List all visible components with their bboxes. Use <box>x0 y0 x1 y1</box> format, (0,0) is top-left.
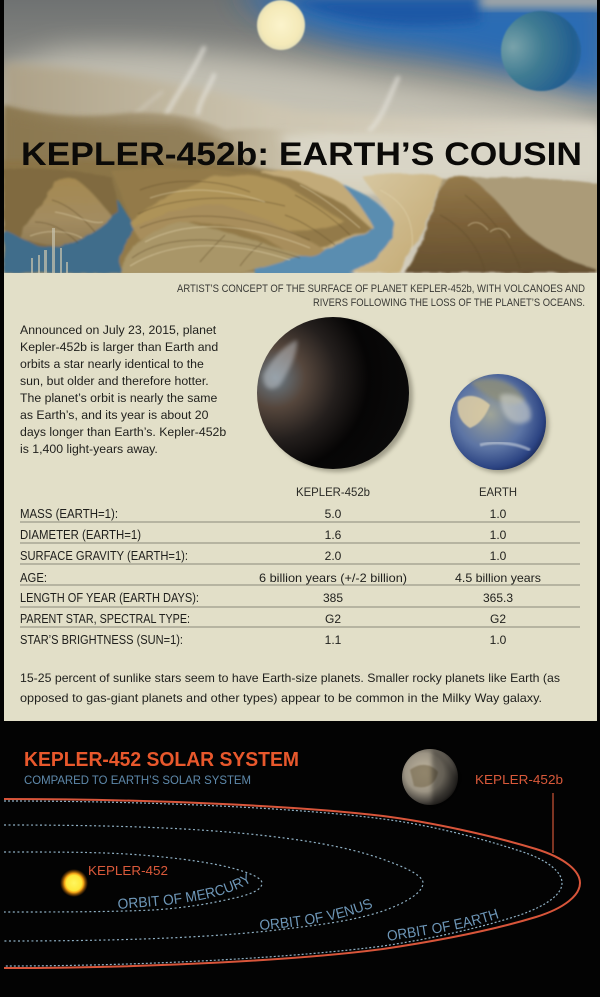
row: diameter: 1.6 <box>325 528 342 542</box>
closing note: 15-25 percent of sunlike stars seem to have Earth-size planets. Smaller rocky planets like Earth (as <box>20 671 560 685</box>
closing note <box>20 671 560 705</box>
row: mass: MASS (EARTH=1): <box>20 507 118 521</box>
panel: comparison data <box>4 273 597 721</box>
centre middle ridge <box>133 205 325 257</box>
pale left bank <box>262 170 374 256</box>
blue sky <box>235 0 600 95</box>
section subheading: COMPARED TO EARTH’S SOLAR SYSTEM <box>24 773 251 787</box>
intro paragraph: as Earth’s, and its year is about 20 <box>20 408 209 422</box>
centre lower ridge <box>120 222 302 273</box>
intro paragraph: Kepler-452b is larger than Earth and <box>20 340 218 354</box>
pale plain <box>280 135 600 180</box>
table column headers <box>296 485 517 499</box>
label: orbit of Venus: ORBIT OF VENUS <box>260 899 372 930</box>
title: KEPLER-452b: EARTH’S COUSIN <box>21 136 582 172</box>
hero: artist's painting of the planet surface <box>0 0 600 276</box>
row: length of year: 385 <box>323 591 343 605</box>
data table <box>20 507 580 647</box>
intro paragraph <box>20 323 226 456</box>
volcanic plumes <box>135 48 398 130</box>
row: parent star: PARENT STAR, SPECTRAL TYPE: <box>20 612 190 626</box>
river lower section <box>4 200 140 273</box>
intro paragraph: Announced on July 23, 2015, planet <box>20 323 217 337</box>
label: orbit of Mercury: ORBIT OF MERCURY <box>118 873 249 909</box>
row: surface gravity: SURFACE GRAVITY (EARTH=1): <box>20 549 188 563</box>
centre upper ridge <box>130 175 345 232</box>
planet: Earth <box>450 374 549 473</box>
intro paragraph: The planet’s orbit is nearly the same <box>20 391 217 405</box>
back brown slopes <box>4 168 118 247</box>
river <box>255 184 395 276</box>
orbit of Kepler-452b <box>4 799 580 968</box>
intro paragraph: orbits a star nearly identical to the <box>20 357 204 371</box>
rock strata <box>35 180 484 266</box>
row: parent star <box>20 612 506 626</box>
pale right bank <box>350 173 442 273</box>
row: length of year: LENGTH OF YEAR (EARTH DAYS): <box>20 591 199 605</box>
dark mountain <box>405 176 597 273</box>
terrain <box>4 168 600 276</box>
planet: small Kepler-452b <box>402 749 458 805</box>
orbit of Mercury <box>4 852 262 912</box>
row: length of year: 365.3 <box>483 591 513 605</box>
caption <box>177 283 585 309</box>
row: parent star: G2 <box>325 612 341 626</box>
row: brightness: 1.0 <box>490 633 507 647</box>
distant moon planet <box>501 11 581 91</box>
far slopes <box>4 63 597 146</box>
row: brightness: 1.1 <box>325 633 342 647</box>
label: Kepler-452b: KEPLER-452b <box>475 772 563 787</box>
left lit ridge <box>20 177 113 247</box>
row: parent star: G2 <box>490 612 506 626</box>
row: surface gravity: 2.0 <box>325 549 342 563</box>
row: age: 4.5 billion years <box>455 571 541 585</box>
closing note: opposed to gas-giant planets and other types) appear to be common in the Milky Way galaxy. <box>20 691 542 705</box>
row: surface gravity: 1.0 <box>490 549 507 563</box>
row: mass <box>20 507 507 521</box>
row: mass: 5.0 <box>325 507 342 521</box>
row: length of year <box>20 591 513 605</box>
orbit of Earth <box>4 801 562 966</box>
sun <box>257 0 305 50</box>
right background slope <box>430 177 600 273</box>
intro paragraph: sun, but older and therefore hotter. <box>20 374 209 388</box>
row: brightness: STAR’S BRIGHTNESS (SUN=1): <box>20 633 183 647</box>
row: diameter: DIAMETER (EARTH=1) <box>20 528 141 542</box>
label: Kepler-452: KEPLER-452 <box>88 863 168 878</box>
terrain base <box>4 160 280 273</box>
leader line <box>552 793 554 853</box>
intro paragraph: is 1,400 light-years away. <box>20 442 158 456</box>
row: mass: 1.0 <box>490 507 507 521</box>
section heading: KEPLER-452 SOLAR SYSTEM <box>24 749 299 771</box>
mid ground <box>4 105 600 195</box>
table column headers: EARTH <box>479 485 517 499</box>
orbit of Venus <box>4 825 423 941</box>
row: age <box>20 571 541 585</box>
row: age: 6 billion years (+/-2 billion) <box>259 571 407 585</box>
intro paragraph: days longer than Earth’s. Kepler-452b <box>20 425 226 439</box>
panel: solar system diagram <box>4 749 581 969</box>
planet: Kepler-452b <box>257 317 413 472</box>
table column headers: KEPLER-452b <box>296 485 370 499</box>
row: diameter <box>20 528 507 542</box>
haze band <box>0 48 600 135</box>
row: surface gravity <box>20 549 507 563</box>
row: age: AGE: <box>20 571 47 585</box>
rock spires <box>31 228 68 273</box>
star <box>60 869 88 897</box>
row: brightness <box>20 633 507 647</box>
label: orbit of Earth: ORBIT OF EARTH <box>388 908 498 940</box>
row: diameter: 1.0 <box>490 528 507 542</box>
